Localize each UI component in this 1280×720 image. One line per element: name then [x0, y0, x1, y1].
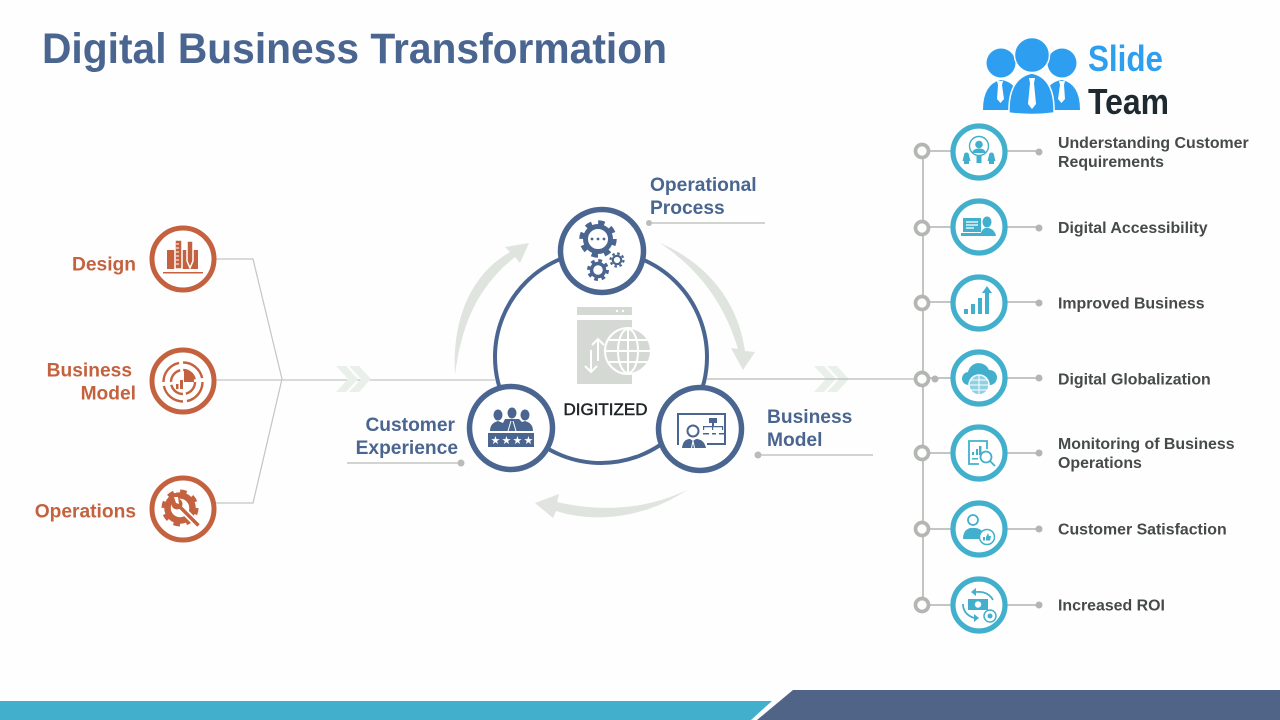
chevron arrow: left: [336, 366, 371, 392]
central ring: [495, 251, 707, 463]
left column: Design: [72, 228, 214, 290]
footer band: navy: [757, 690, 1280, 720]
icon: gears: [560, 210, 644, 292]
icon: rated team: ★★★★: [490, 434, 534, 447]
leader line: [347, 460, 464, 466]
left column: Business Model: [47, 350, 214, 412]
label: Operations: [35, 502, 136, 522]
node: customer experience: [347, 386, 552, 470]
connector: [916, 296, 1042, 310]
connector: [916, 598, 1042, 612]
icon: rising bars: [953, 277, 1005, 329]
center label: DIGITIZED: [563, 400, 648, 419]
icon: rated team: [470, 386, 552, 470]
right item: Improved Business: [916, 277, 1205, 329]
text: Understanding Customer: [1058, 135, 1249, 152]
cycle arrow: top left: [455, 243, 529, 375]
icon: report and magnifier: [953, 427, 1005, 479]
connector: [916, 144, 1042, 158]
icon: person and thumbs up: [953, 503, 1005, 555]
right item: Digital Accessibility: [916, 201, 1208, 253]
label: Customer: [365, 415, 456, 436]
icon: money cycle: [953, 579, 1005, 631]
text: Digital Accessibility: [1058, 220, 1208, 237]
icon: cloud globe: [953, 352, 1005, 404]
right timeline spine: [922, 151, 924, 605]
right item: Digital Globalization: [916, 352, 1211, 404]
node: business model: [658, 388, 873, 470]
left column: Operations: [35, 478, 214, 540]
cycle arrow: top right: [660, 243, 755, 370]
icon: presenter at board: [658, 388, 742, 470]
icon: ruler and pencil: [152, 228, 214, 290]
connector: [916, 446, 1042, 460]
text: Digital Globalization: [1058, 372, 1211, 388]
leader line: [646, 220, 765, 226]
icon: gear and wrench: [152, 478, 214, 540]
label: Business: [47, 360, 132, 382]
right item: Customer Satisfaction: [916, 503, 1227, 555]
chevron arrow: right: [814, 366, 849, 392]
label: Operational: [650, 175, 757, 196]
connector: [916, 222, 1042, 234]
text: Increased ROI: [1058, 598, 1165, 614]
left connector lines: [214, 259, 495, 503]
right item: Increased ROI: [916, 579, 1165, 631]
text: Improved Business: [1058, 296, 1205, 312]
logo word: Team: Team: [1088, 81, 1169, 122]
label line two: Process: [650, 198, 725, 219]
node: operational process: [560, 175, 765, 292]
cycle arrow: bottom: [535, 490, 687, 518]
connector: [916, 522, 1042, 536]
line behind ring: right output: [707, 378, 922, 380]
label: Design: [72, 254, 136, 276]
footer band: teal: [0, 701, 772, 720]
right item: Understanding Customer Requirements: [916, 126, 1249, 178]
label line two: Model: [767, 430, 822, 451]
center icon: browser and globe: [577, 307, 651, 384]
icon: target chart: [152, 350, 214, 412]
logo: SlideTeam: [983, 38, 1169, 122]
logo icon: three people: [983, 38, 1080, 114]
logo word: Slide: Slide: [1088, 38, 1163, 79]
icon: customers: [953, 126, 1005, 178]
label line two: Experience: [356, 438, 458, 459]
connector: [916, 372, 1042, 386]
text line two: Operations: [1058, 455, 1142, 472]
text: Monitoring of Business: [1058, 436, 1235, 453]
leader line: [754, 452, 873, 458]
icon: laptop and person: [953, 201, 1005, 253]
label: Business: [767, 407, 852, 428]
text line two: Requirements: [1058, 154, 1164, 171]
label line two: Model: [81, 384, 136, 404]
title: Digital Business Transformation: [42, 25, 667, 73]
text: Customer Satisfaction: [1058, 522, 1227, 538]
right item: Monitoring of Business Operations: [916, 427, 1235, 479]
